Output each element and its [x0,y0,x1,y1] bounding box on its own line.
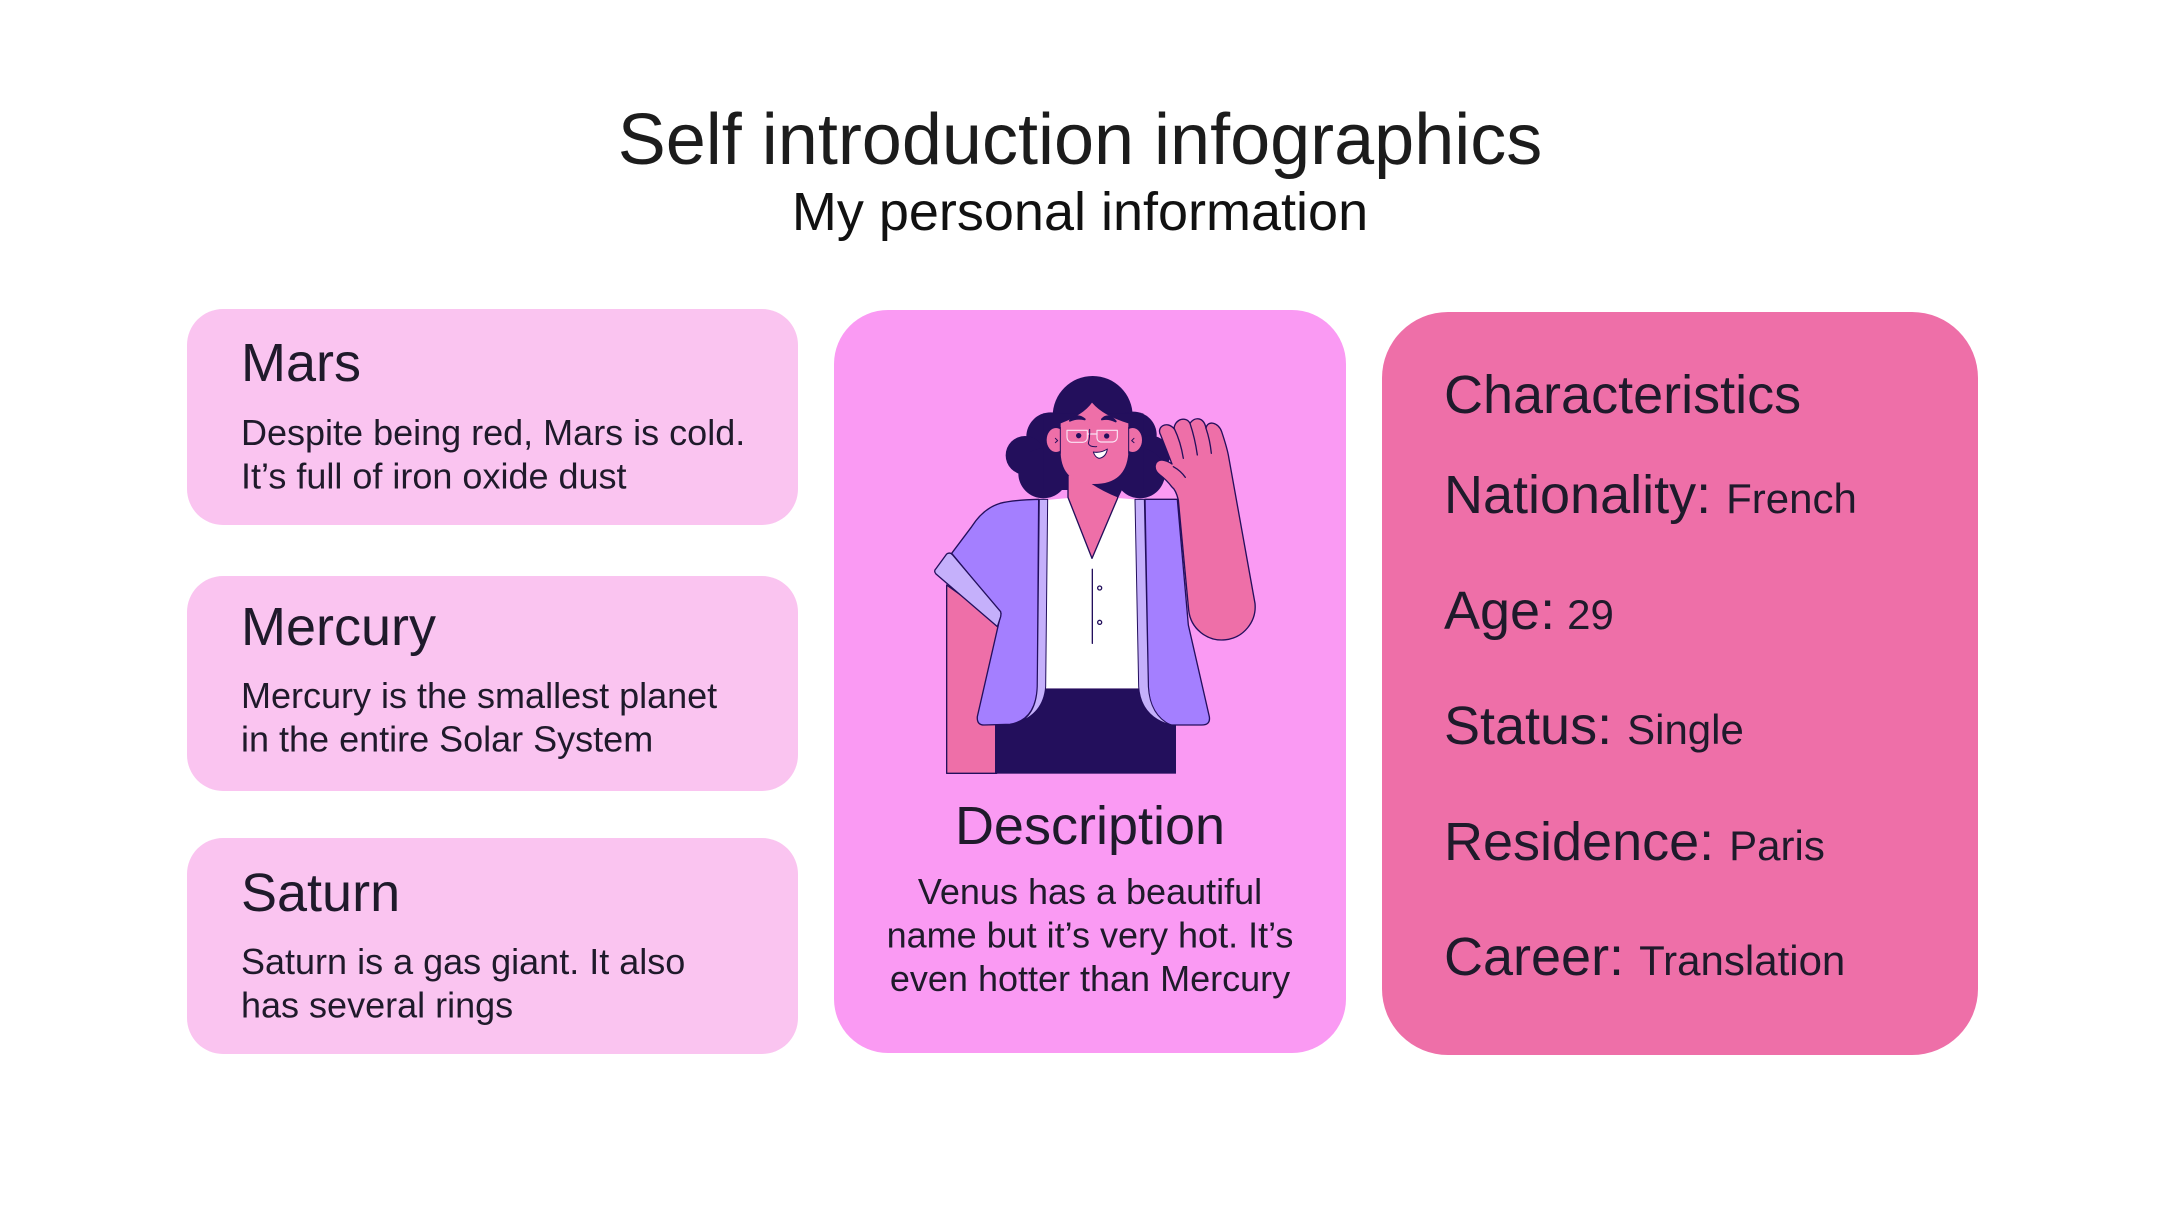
text block: Saturn description: has several rings [241,984,513,1026]
heading: Mercury: Mercury [241,597,436,657]
heading: Characteristics: Characteristics [1444,365,1801,425]
illustration: waving woman [935,376,1255,774]
smile [1093,449,1107,458]
eyes [1076,433,1109,439]
eyebrows [1070,416,1116,421]
heading: Saturn: Saturn [241,863,400,923]
right ear [1123,428,1142,452]
left cardigan [952,499,1039,725]
panel: Mars [187,309,798,525]
cuff [935,553,1001,627]
shirt buttons and seam [1092,569,1102,643]
text block: Mercury description: in the entire Solar System [241,718,653,760]
face edge lines [1055,427,1134,453]
field: Status: Status: Single [1444,696,1744,756]
panel: Characteristics [1382,312,1978,1055]
title: Self introduction infographics [618,100,1542,180]
hair wedge under chin [1092,473,1130,498]
text block: Description body: name but it’s very hot. It’s [887,914,1293,956]
text block: Saturn description: Saturn is a gas giant. It also [241,941,685,982]
subtitle: My personal information [792,182,1368,242]
neck [1068,475,1118,558]
text block: Description body: even hotter than Mercury [890,958,1290,999]
field: Career: Career: Translation [1444,927,1845,987]
face [1061,403,1128,484]
field: Nationality: Nationality: French [1444,465,1857,525]
back arm [947,585,1000,773]
skirt [995,688,1176,774]
right cardigan [1145,499,1210,725]
field: Age: Age: 29 [1444,581,1614,641]
hair [1006,376,1170,498]
left ear [1047,428,1065,452]
right placket [1135,499,1171,725]
panel: Saturn [187,838,798,1054]
nose [1088,429,1097,447]
panel: Mercury [187,576,798,791]
raised arm and hand [1155,419,1255,640]
text block: Mercury description: Mercury is the smallest planet [241,675,717,716]
heading: Description: Description [955,796,1225,856]
field: Residence: Residence: Paris [1444,812,1825,872]
text block: Mars description: It’s full of iron oxide dust [241,456,627,496]
finger creases [1173,423,1211,477]
heading: Mars: Mars [241,333,361,393]
text block: Description body: Venus has a beautiful [918,871,1262,912]
left placket [1012,499,1048,724]
shirt [1046,498,1139,688]
glasses [1067,430,1117,442]
panel: Description [834,310,1346,1053]
text block: Mars description: Despite being red, Mars is cold. [241,412,745,453]
